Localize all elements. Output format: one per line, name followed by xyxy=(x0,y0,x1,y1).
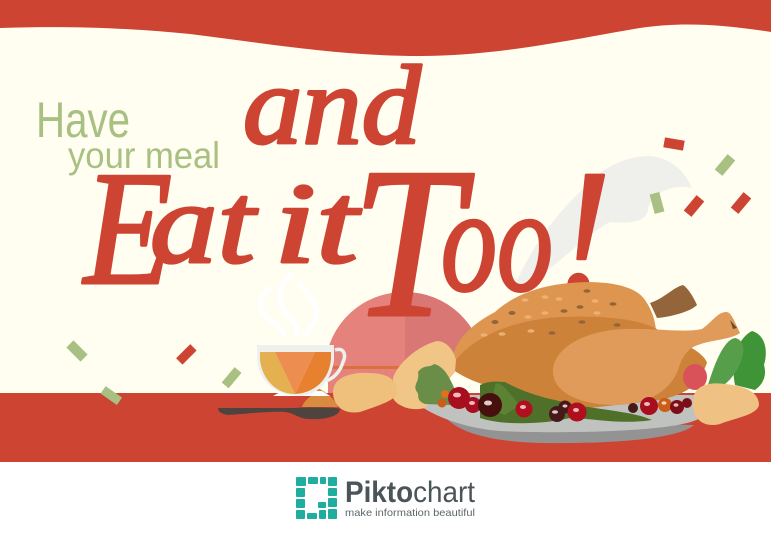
top red wave xyxy=(0,0,771,56)
turkey back xyxy=(450,282,656,380)
heading: and Eat it Too!: E xyxy=(82,139,172,319)
berries xyxy=(438,387,692,422)
turkey highlights xyxy=(480,295,600,337)
heading: and Eat it Too! xyxy=(82,44,611,362)
turkey spots xyxy=(492,289,620,335)
heading: and Eat it Too!: oo xyxy=(441,159,553,323)
turkey body xyxy=(451,317,707,408)
bottom red table xyxy=(0,393,771,462)
turkey xyxy=(450,282,740,408)
logo wordmark: Piktochart xyxy=(345,476,476,509)
stuffing xyxy=(683,364,707,390)
right greens xyxy=(707,331,766,390)
heading: and Eat it Too!: and xyxy=(243,44,422,168)
heading: and Eat it Too!: ! xyxy=(556,133,611,332)
garnish leaves xyxy=(415,364,652,423)
napkin xyxy=(515,156,692,285)
heading: and Eat it Too!: T xyxy=(352,123,474,362)
heading: Have your meal xyxy=(36,92,220,176)
logo icon xyxy=(296,477,337,519)
heading: and Eat it Too!: at xyxy=(150,160,259,287)
plate xyxy=(405,390,700,443)
heading: and Eat it Too!: it xyxy=(274,160,362,287)
icon: spoon xyxy=(218,388,340,419)
serving cloche xyxy=(325,292,484,393)
logo wordmark: make information beautiful xyxy=(345,507,475,519)
heading: Have your meal: your meal xyxy=(68,135,220,176)
icon: steam xyxy=(260,275,317,335)
right potato xyxy=(693,383,759,425)
left potatoes xyxy=(333,341,456,413)
turkey leg xyxy=(553,312,740,405)
cream panel xyxy=(0,20,771,400)
heading: Have your meal: Have xyxy=(36,92,130,148)
turkey tail xyxy=(650,285,697,318)
confetti xyxy=(66,137,751,405)
bone tip xyxy=(730,320,737,329)
icon: tea cup xyxy=(257,345,344,396)
